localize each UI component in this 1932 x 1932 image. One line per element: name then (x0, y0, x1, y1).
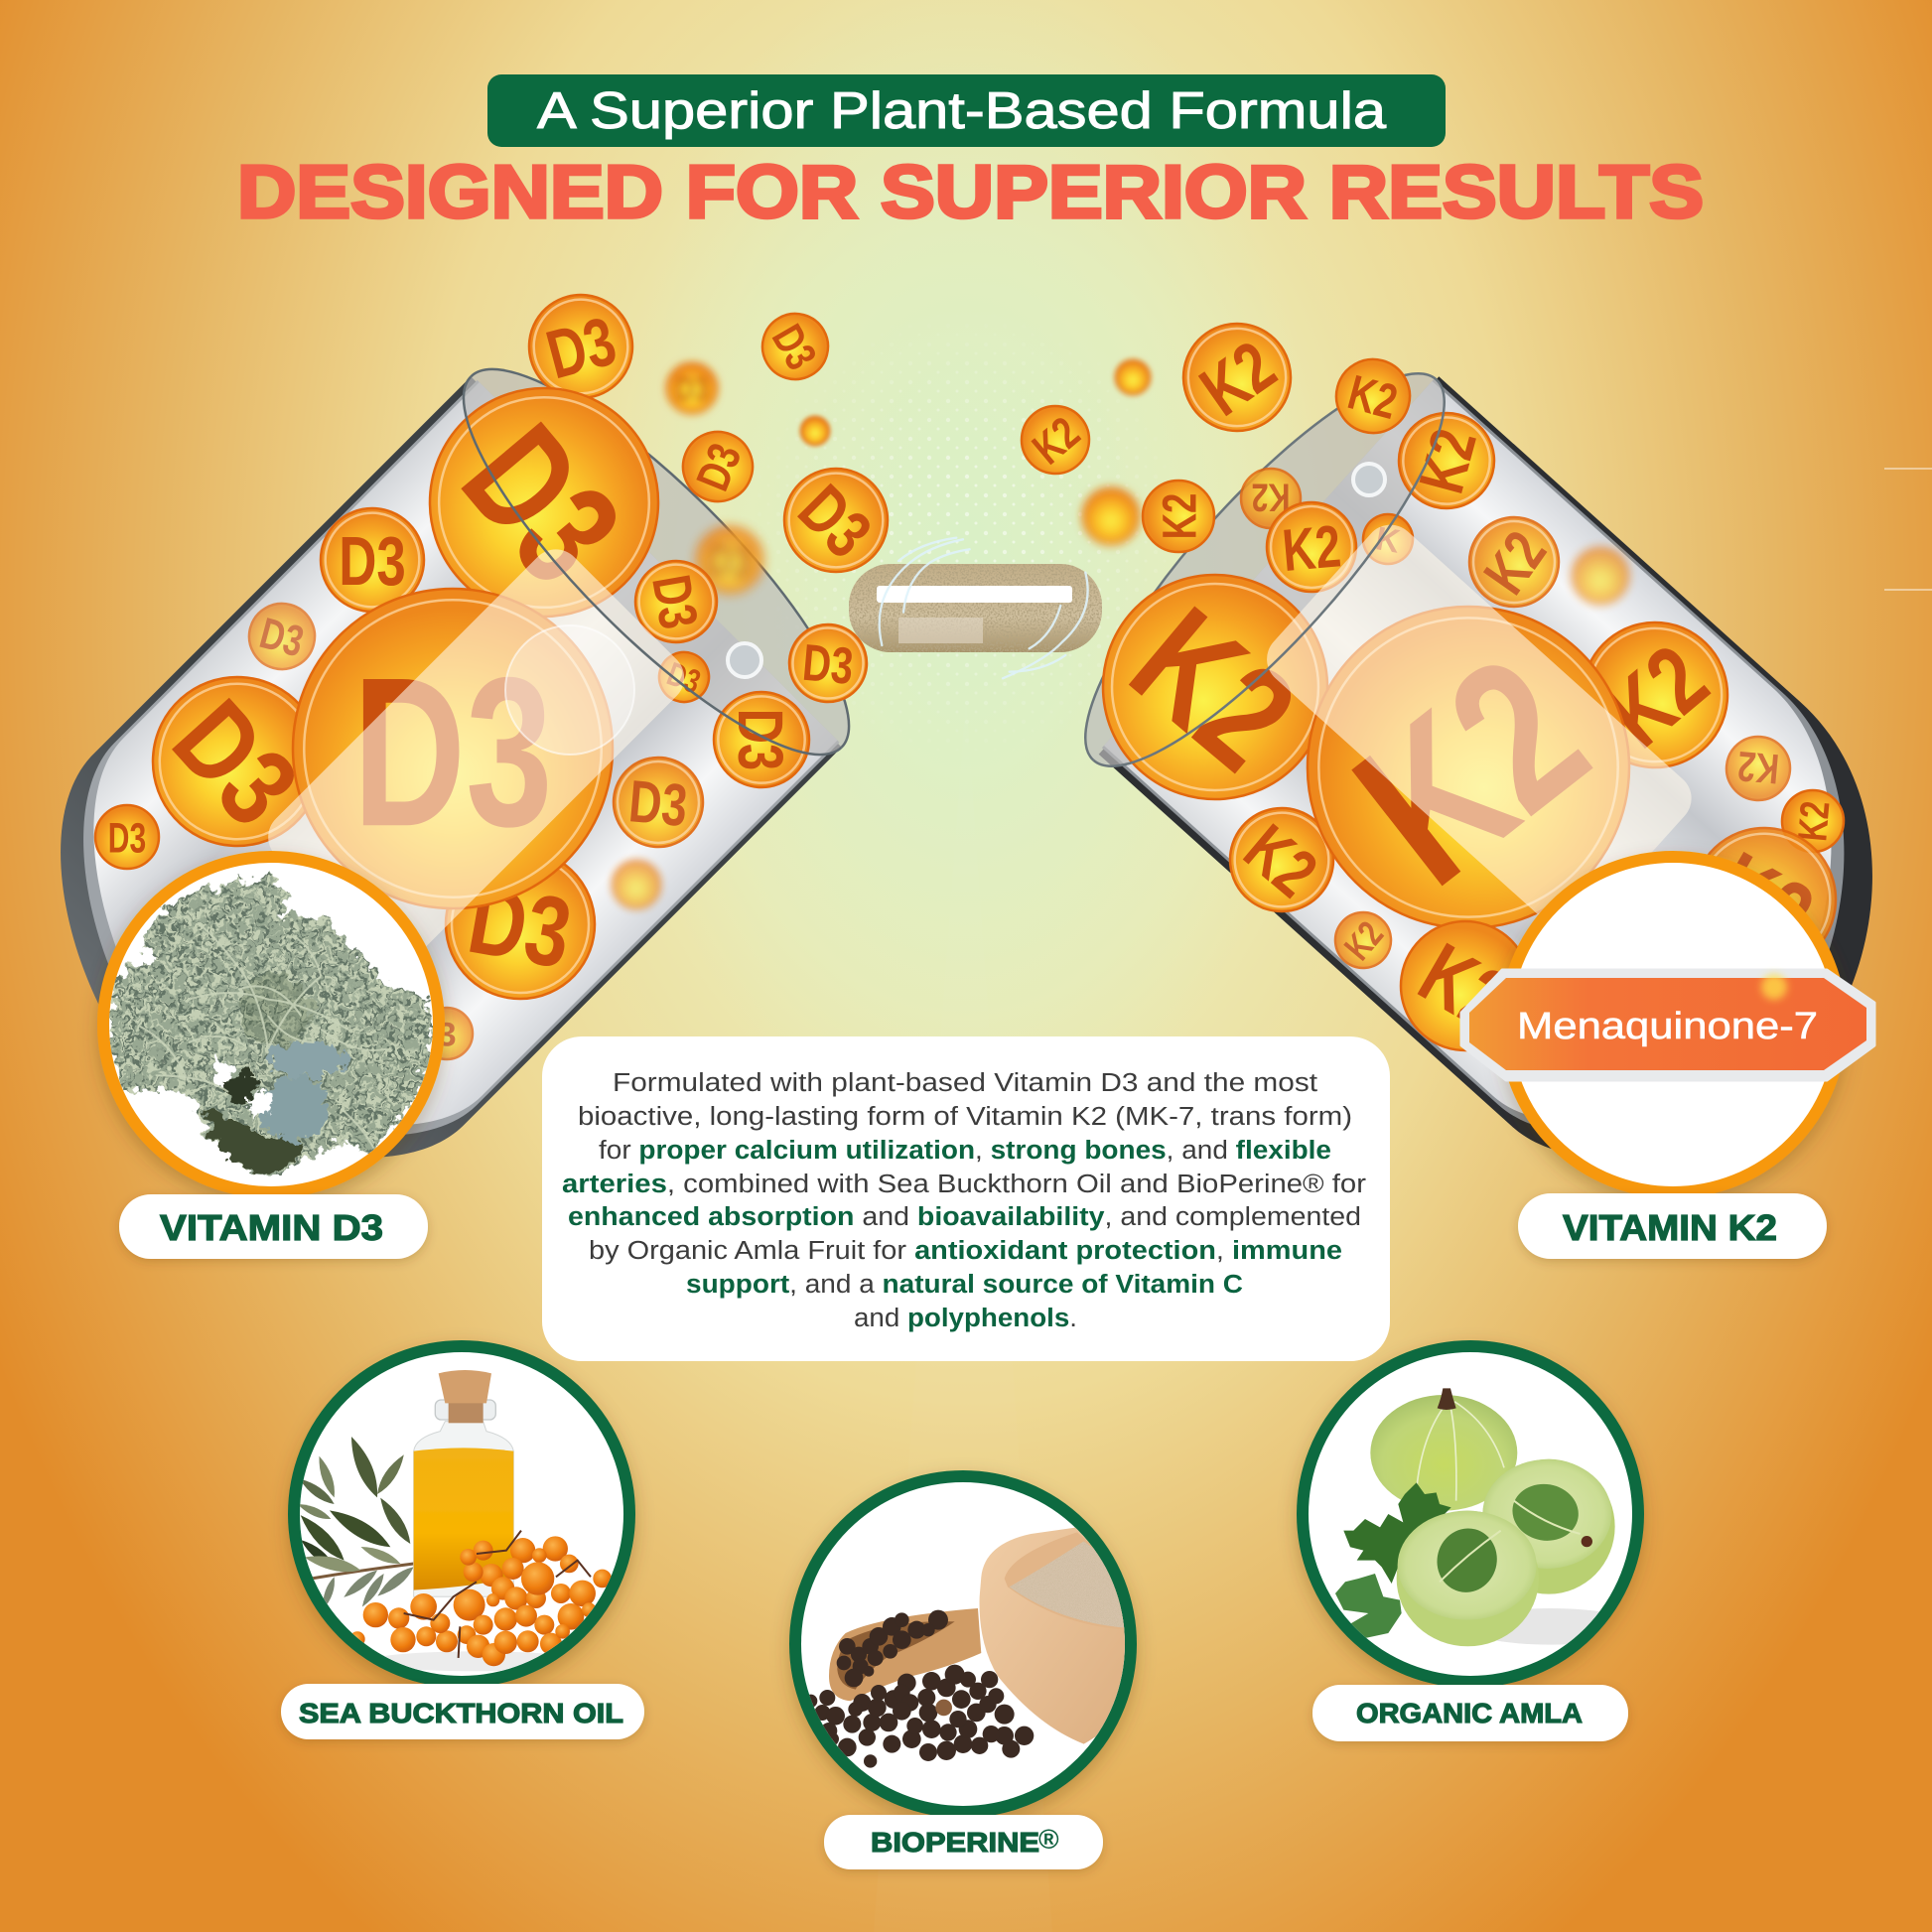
label: sea buckthorn oil (281, 1684, 644, 1739)
ghost glass bubble (505, 625, 634, 755)
K2 small pale bubble: K2 (1336, 913, 1391, 968)
K2 vertical bubble: K2 (1154, 493, 1206, 539)
blurred tiny bubble (801, 417, 829, 445)
D3 bubble top (517, 283, 644, 410)
pale inverted bubble: K2 (1735, 742, 1781, 792)
biggest D3 bubble: D3 (352, 633, 553, 871)
K2 bubble behind banner: K2 (1404, 925, 1524, 1050)
halved amla front (1397, 1511, 1539, 1646)
drop highlight (728, 643, 761, 677)
K2 large bubble left: K2 (1102, 576, 1325, 801)
halftone dots (786, 361, 1148, 713)
rotated bubble lower lip (714, 692, 809, 787)
blurred bubble right (1573, 548, 1628, 604)
D3 bubble rotated (672, 421, 763, 512)
K2 bubble small: K2 (1023, 407, 1089, 474)
K2 large bubble left (1057, 529, 1373, 845)
description text: support , and a natural source of Vitamin C (686, 1271, 1243, 1299)
blurred bubble at lip: D3 (706, 535, 753, 588)
D3 bubble small top: D3 (762, 317, 826, 377)
berries (349, 1531, 612, 1671)
small bubble at lip: D3 (662, 655, 705, 701)
description text: Formulated with plant-based Vitamin D3 and the most (613, 1069, 1317, 1097)
lichen photo (109, 874, 432, 1174)
K2 pale bubble inverted (1241, 469, 1301, 528)
title banner: A Superior Plant-Based Formula (537, 82, 1386, 140)
title banner (487, 74, 1446, 147)
label: vitamin D3 (119, 1194, 428, 1259)
blurred bubble: D3 (676, 371, 708, 408)
blurred bubble left (1083, 488, 1139, 544)
glass wash (257, 539, 695, 976)
K2 bubble far right: K2 (1789, 799, 1839, 843)
leaves (296, 1434, 417, 1611)
D3 bubble near pill (786, 621, 870, 705)
vitamin K2 circle (1505, 857, 1841, 1192)
oil bottle (414, 1370, 513, 1596)
K2 vertical bubble (1143, 481, 1214, 552)
label: organic amla: ORGANIC AMLA (1356, 1698, 1583, 1728)
glass wash (1256, 514, 1702, 943)
vitamin D3 circle (103, 857, 439, 1192)
lichen branches (139, 923, 387, 1149)
biggest K2 bubble (1243, 542, 1694, 993)
label: bioperine (824, 1815, 1103, 1869)
K2 pale bubble: K2 (1471, 519, 1559, 606)
large D3 bubble top: D3 (431, 395, 652, 614)
lower D3 bubble: D3 (461, 864, 579, 990)
K2 bubble in opening (1263, 498, 1360, 596)
K2 small bubble in opening (1359, 510, 1417, 568)
label: bioperine: BIOPERINE (871, 1827, 1039, 1858)
label: bioperine: ® (1038, 1824, 1059, 1855)
K2 bubble lower left: K2 (1230, 809, 1331, 911)
far left D3 bubble (95, 805, 159, 869)
D3 bubble rotated: D3 (686, 436, 751, 497)
K2 small pale bubble (1324, 901, 1402, 979)
capsule glass body left (0, 324, 895, 1260)
far left D3 bubble: D3 (108, 814, 146, 862)
main heading: DESIGNED FOR SUPERIOR RESULTS (237, 150, 1704, 233)
K2 bubble lower right (1667, 802, 1862, 997)
sea buckthorn circle (294, 1346, 629, 1682)
capsule lip (1093, 379, 1489, 808)
pale inverted bubble (1724, 734, 1793, 803)
description text: enhanced absorption and bioavailability , and complemented (568, 1203, 1361, 1231)
whole amla (1370, 1388, 1517, 1511)
D3 bubble in glass: D3 (339, 522, 406, 600)
wooden scoop (829, 1608, 981, 1701)
K2 bubble pale at lip (1388, 402, 1505, 519)
peppercorn pile (804, 1665, 1034, 1768)
K2 bubble pale at lip: K2 (1405, 422, 1490, 500)
large D3 bubble top (383, 342, 705, 663)
D3 bubble lower right (610, 754, 707, 851)
K2 pale bubble (1451, 499, 1577, 624)
small leaf (1335, 1574, 1402, 1638)
peppercorns in scoop (837, 1610, 948, 1687)
D3 bubble near pill: D3 (800, 633, 856, 695)
D3 bubble lower right: D3 (626, 767, 690, 839)
D3 bubble right (762, 447, 909, 594)
black pepper photo (804, 1527, 1130, 1768)
left capsule: vitamin D3 (0, 283, 909, 1260)
right capsule: vitamin K2 (1008, 303, 1932, 1251)
label: vitamin K2 (1518, 1193, 1827, 1259)
label: vitamin D3: VITAMIN D3 (160, 1207, 383, 1248)
description panel (542, 1036, 1390, 1361)
D3 bubble in glass (321, 508, 424, 612)
bubble under circle: 3 (437, 1016, 457, 1053)
label: vitamin K2: VITAMIN K2 (1563, 1207, 1777, 1248)
halved amla right (1482, 1459, 1615, 1594)
K2 bubble right: K2 (1586, 624, 1726, 767)
small bubble at lip (652, 645, 716, 709)
left D3 bubble: D3 (150, 677, 322, 849)
lower D3 bubble (434, 838, 607, 1011)
amla photo (1335, 1388, 1636, 1646)
left D3 bubble (118, 642, 356, 881)
capsule lip (418, 376, 842, 800)
wooden bowl (980, 1527, 1130, 1744)
D3 bubble small top (751, 302, 840, 391)
sea buckthorn photo (296, 1370, 612, 1671)
K2 bubble at lip top (1328, 351, 1418, 441)
K2 bubble lower left (1209, 787, 1354, 932)
description text: by Organic Amla Fruit for antioxidant protection , immune (589, 1237, 1342, 1265)
description text: arteries , combined with Sea Buckthorn Oil and BioPerine® for (562, 1171, 1367, 1198)
pale bubble (242, 597, 322, 676)
label: sea buckthorn oil: SEA BUCKTHORN OIL (299, 1698, 623, 1728)
blurred bubble (667, 363, 717, 413)
description text: for proper calcium utilization , strong bones , and flexible (599, 1137, 1331, 1165)
Menaquinone-7 banner: Menaquinone-7 (1517, 1006, 1818, 1047)
biggest K2 bubble: K2 (1314, 612, 1626, 928)
pale bubble: D3 (255, 609, 309, 667)
large leaf (1343, 1482, 1451, 1584)
D3 bubble right: D3 (784, 470, 887, 572)
description text: and polyphenols . (854, 1305, 1077, 1332)
rotated bubble lower lip: D3 (725, 709, 796, 770)
D3 bubble at lip: D3 (640, 571, 710, 633)
blurred bubble at lip (694, 524, 765, 596)
capsule glass body right (1040, 329, 1932, 1251)
capsule motion rings (880, 538, 1088, 678)
K2 small bubble in opening: K (1373, 520, 1403, 561)
K2 bubble in opening: K2 (1280, 512, 1343, 584)
K2 bubble lower right: K2 (1697, 832, 1830, 971)
blurred bubble (1116, 360, 1150, 394)
center herbal capsule (849, 538, 1102, 678)
description text (562, 1069, 1367, 1332)
blurred bubble lower (613, 861, 660, 908)
biggest D3 bubble (293, 589, 613, 908)
bioperine circle (795, 1476, 1131, 1812)
K2 pale bubble inverted: K2 (1251, 476, 1291, 519)
Menaquinone-7 banner (1461, 970, 1874, 1080)
bubble under circle (421, 1008, 473, 1059)
amla circle (1303, 1346, 1638, 1682)
K2 bubble right (1553, 593, 1757, 797)
K2 bubble top (1163, 303, 1311, 452)
D3 bubble top: D3 (539, 302, 623, 393)
K2 bubble small (1008, 392, 1103, 487)
K2 bubble behind banner (1377, 897, 1554, 1074)
description text: bioactive, long-lasting form of Vitamin K2 (MK-7, trans form) (578, 1103, 1352, 1131)
drop highlight (1353, 464, 1385, 495)
label: organic amla (1312, 1685, 1628, 1741)
D3 bubble at lip (629, 555, 723, 648)
K2 bubble far right (1779, 787, 1847, 855)
K2 bubble at lip top: K2 (1342, 364, 1403, 430)
K2 bubble top: K2 (1186, 327, 1290, 431)
